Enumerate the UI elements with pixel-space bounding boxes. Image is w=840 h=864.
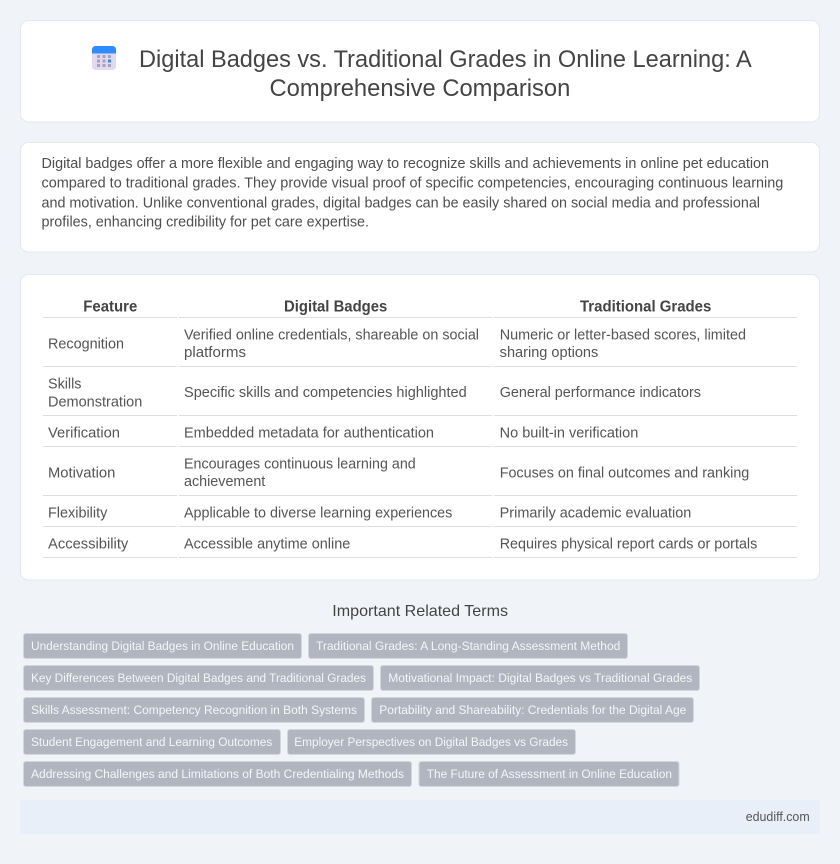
row: accessibility: Requires physical report cards or portals — [500, 536, 757, 552]
row: skills demonstration: Skills — [48, 376, 82, 392]
table header row: Traditional Grades — [580, 299, 711, 316]
related term tags: Traditional Grades: A Long-Standing Assessment Method — [316, 639, 620, 653]
related term tags: Employer Perspectives on Digital Badges vs Grades — [294, 735, 568, 749]
related term tags: Student Engagement and Learning Outcomes — [31, 735, 272, 749]
table header row — [83, 299, 711, 316]
related term tags: The Future of Assessment in Online Education — [427, 767, 672, 781]
related term tags: Understanding Digital Badges in Online Education — [31, 639, 294, 653]
table header row: Feature — [83, 299, 138, 316]
row: skills demonstration: Specific skills and competencies highlighted — [184, 385, 467, 401]
row: motivation: Focuses on final outcomes and ranking — [500, 466, 749, 482]
panel: comparison table — [20, 274, 820, 580]
row: recognition: Numeric or letter-based scores, limited — [500, 327, 746, 343]
row: flexibility: Flexibility — [48, 505, 108, 521]
row: recognition — [48, 327, 746, 361]
row: accessibility — [48, 536, 757, 552]
row: flexibility — [48, 505, 691, 521]
row: motivation: achievement — [184, 474, 265, 490]
panel: introduction — [20, 142, 820, 252]
row: verification: Embedded metadata for authentication — [184, 425, 434, 441]
intro text block: compared to traditional grades. They provide visual proof of specific competencies, encouraging continuous learning — [42, 176, 783, 192]
row: motivation: Motivation — [48, 466, 115, 482]
row: verification: Verification — [48, 425, 120, 441]
related term tags: Addressing Challenges and Limitations of Both Credentialing Methods — [31, 767, 404, 781]
row: verification — [48, 425, 638, 441]
row: motivation: Encourages continuous learning and — [184, 456, 416, 472]
title: Comprehensive Comparison — [270, 75, 570, 102]
title: Digital Badges vs. Traditional Grades in Online Learning: A — [139, 46, 752, 73]
row: skills demonstration: Demonstration — [48, 394, 142, 410]
intro text block — [42, 156, 783, 231]
footer bar: edudiff.com — [746, 809, 810, 824]
related term tags: Skills Assessment: Competency Recognition in Both Systems — [31, 703, 357, 717]
row: accessibility: Accessible anytime online — [184, 536, 350, 552]
intro text block: Digital badges offer a more flexible and engaging way to recognize skills and achievements in online pet education — [42, 156, 769, 172]
related term tags: Portability and Shareability: Credentials for the Digital Age — [379, 703, 686, 717]
row: verification: No built-in verification — [500, 425, 638, 441]
intro text block: and motivation. Unlike conventional grades, digital badges can be easily shared on social media and professional — [42, 195, 760, 211]
heading: important related terms: Important Related Terms — [332, 603, 508, 620]
row: recognition: platforms — [184, 345, 246, 361]
row: flexibility: Primarily academic evaluation — [500, 505, 691, 521]
row: skills demonstration: General performance indicators — [500, 385, 701, 401]
row: skills demonstration — [48, 376, 701, 410]
title — [139, 46, 752, 102]
row: recognition: Verified online credentials, shareable on social — [184, 327, 479, 343]
panel: title header — [20, 20, 820, 122]
row: motivation — [48, 456, 749, 490]
intro text block: profiles, enhancing credibility for pet care expertise. — [42, 215, 369, 231]
row: accessibility: Accessibility — [48, 536, 129, 552]
icon: calendar grid — [92, 46, 116, 70]
row: recognition: sharing options — [500, 345, 598, 361]
related term tags: Motivational Impact: Digital Badges vs Traditional Grades — [388, 671, 692, 685]
row: flexibility: Applicable to diverse learning experiences — [184, 505, 452, 521]
related term tags — [24, 634, 700, 786]
table header row: Digital Badges — [284, 299, 387, 316]
related term tags: Key Differences Between Digital Badges and Traditional Grades — [31, 671, 366, 685]
footer bar — [20, 800, 820, 834]
row: recognition: Recognition — [48, 336, 124, 352]
